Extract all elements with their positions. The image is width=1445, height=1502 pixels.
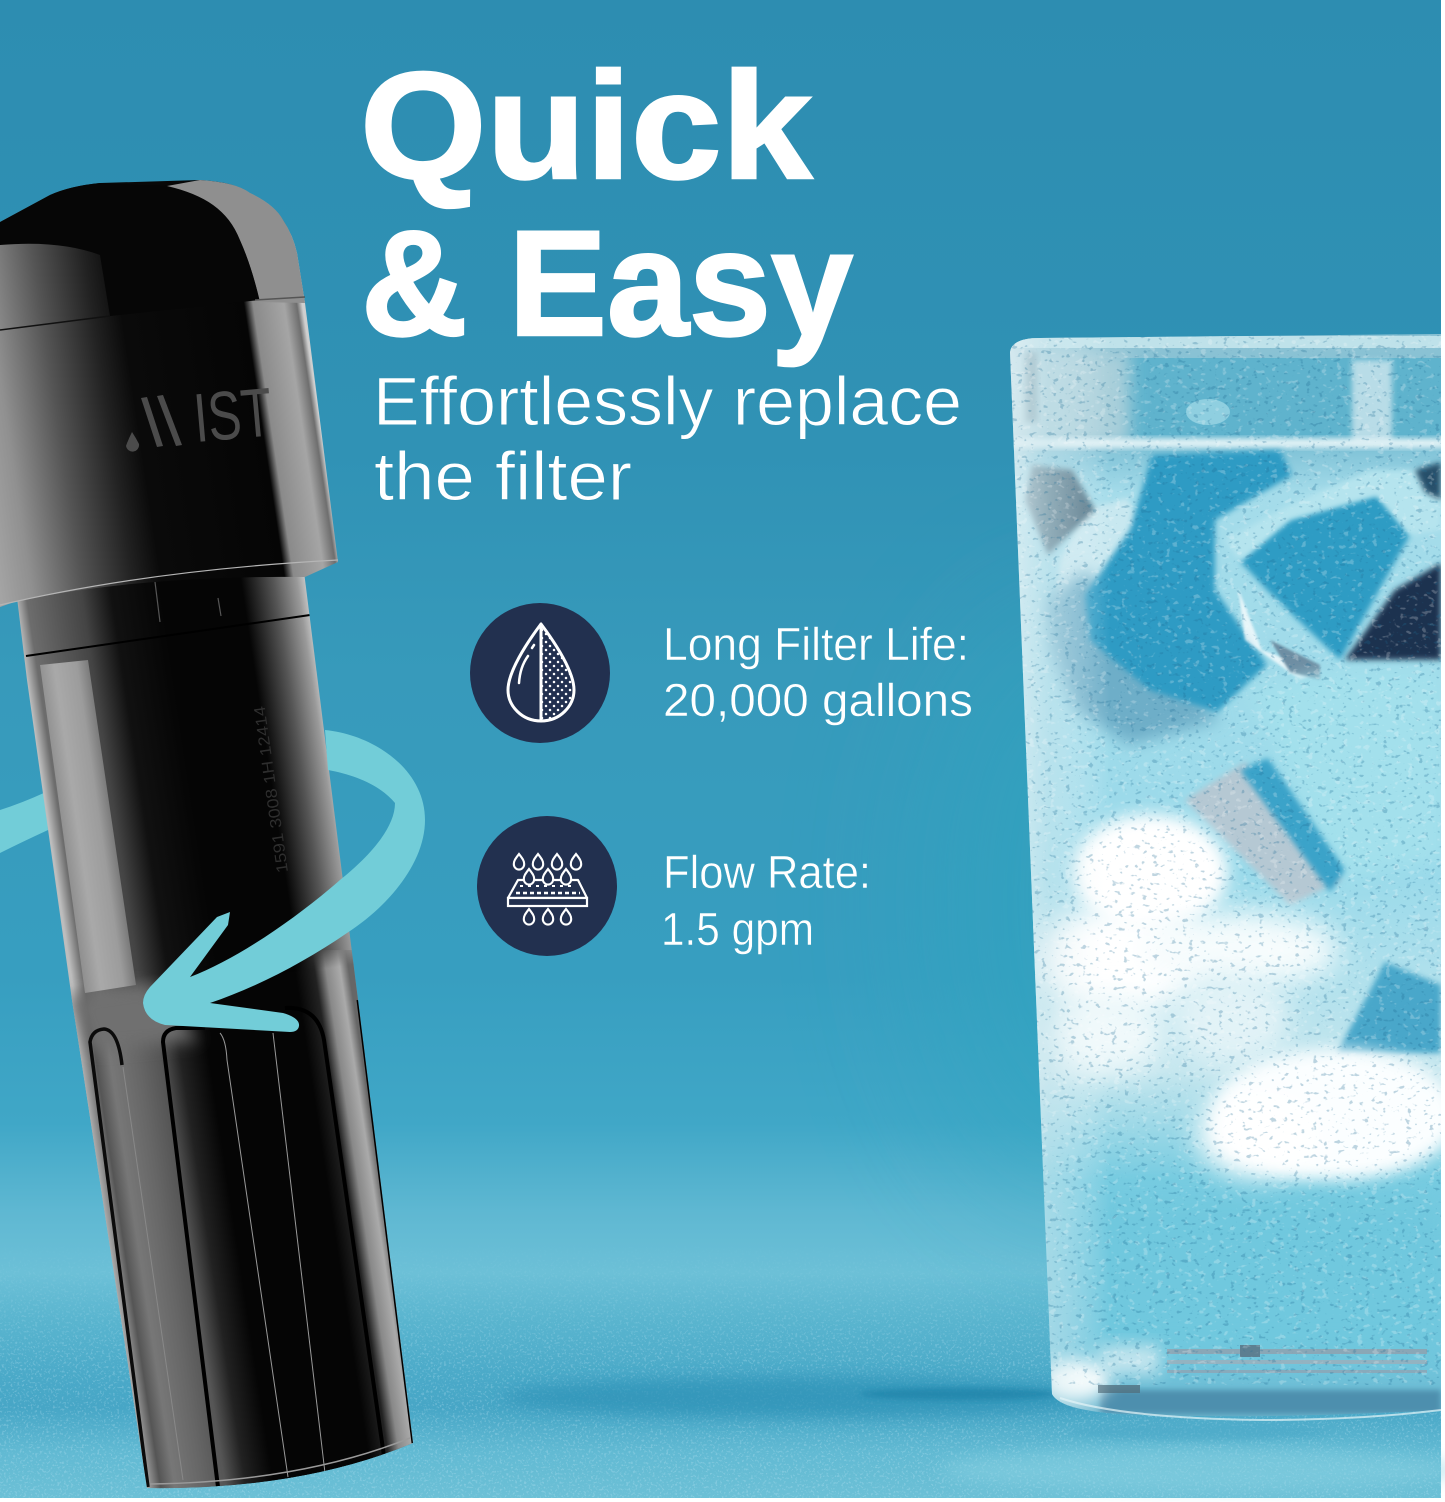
icon: filter life drop: [470, 603, 610, 743]
filter cap: [0, 180, 338, 607]
title: [360, 41, 853, 367]
glass base highlight: [1060, 1398, 1441, 1420]
subtitle: [373, 363, 962, 515]
table shadow: [500, 1377, 1100, 1417]
rotation arrow: [143, 730, 425, 1032]
subtitle: the filter: [374, 438, 632, 515]
feature text: filter life: Long Filter Life:: [663, 618, 969, 670]
rim band: [1010, 336, 1445, 448]
feature text: filter life: [663, 618, 973, 726]
ice cubes: [1025, 450, 1441, 745]
feature text: flow rate: 1.5 gpm: [661, 903, 814, 955]
glass of ice water: [1005, 330, 1445, 1420]
filter label strip: [40, 660, 136, 993]
subtitle: Effortlessly replace: [373, 363, 962, 440]
logo: [126, 373, 275, 457]
serial number: 1591 3008 1H 12414: [252, 705, 292, 874]
product: water filter: [0, 180, 440, 1500]
feature text: flow rate: Flow Rate:: [663, 846, 871, 898]
feature text: filter life: 20,000 gallons: [663, 674, 973, 726]
title: Quick: [360, 41, 812, 211]
logo: IST: [191, 373, 275, 457]
table puddle: [1070, 1424, 1330, 1440]
icon: flow rate drops: [477, 816, 617, 956]
title: & Easy: [361, 199, 853, 367]
lower water: [1050, 1336, 1441, 1416]
feature text: flow rate: [661, 846, 871, 955]
lit ice: [1032, 670, 1445, 1181]
filter tube: [18, 576, 413, 1488]
arrow tail behind filter: [0, 792, 48, 853]
